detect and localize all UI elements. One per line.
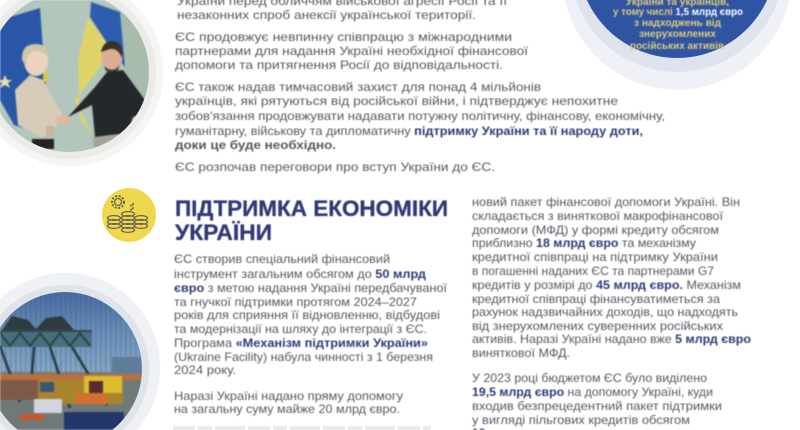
text block: left column on the Ukraine Facility: (Ukraine Facility) набула чинності з 1 березня	[174, 350, 433, 364]
text block: left column on the Ukraine Facility: євро з метою надання Україні передбачуваної	[174, 281, 448, 295]
text block: right column on macro-financial assistance: допомоги (МФД) у формі кредиту обсягом	[472, 223, 719, 237]
text block: EU support for Ukraine: гуманітарну, військову та дипломатичну підтримку України та її народу доти,	[175, 124, 643, 138]
text block: EU support for Ukraine: незаконних спроб анексії української території.	[177, 8, 476, 22]
text block: EU support for Ukraine: ЄС продовжує невпинну співпрацю з міжнародними	[175, 30, 512, 44]
text block: left column on the Ukraine Facility: Програма «Механізм підтримки України»	[174, 336, 428, 350]
circular callout: financial total	[565, 0, 789, 90]
text block: EU support for Ukraine	[175, 0, 665, 174]
text block: left column on the Ukraine Facility	[174, 252, 448, 416]
text block: EU support for Ukraine: українців, які рятуються від російської війни, і підтверджує непохитне	[175, 94, 618, 108]
text block: EU support for Ukraine: доки це буде необхідно.	[175, 138, 336, 152]
text block: right column on macro-financial assistance: у вигляді пільгових кредитів обсягом	[472, 413, 690, 427]
text block: left column on the Ukraine Facility: років для сприяння її відновленню, відбудові	[174, 308, 440, 322]
text block: EU support for Ukraine: ЄС розпочав переговори про вступ України до ЄС.	[175, 160, 495, 174]
text block: left column on the Ukraine Facility: та гнучкої підтримки протягом 2024–2027	[174, 295, 417, 309]
text block: EU support for Ukraine: зобов'язання продовжувати надавати потужну політичну, фінансову, економічну,	[175, 109, 665, 123]
text block: right column on macro-financial assistance: кредитної співпраці фінансуватиметься за	[472, 292, 720, 306]
heading: support for Ukraine's economy: ПІДТРИМКА ЕКОНОМІКИ	[175, 196, 448, 221]
photo: EU and Ukraine leaders shaking hands	[0, 0, 163, 166]
heading: support for Ukraine's economy	[175, 196, 448, 245]
text block: right column on macro-financial assistance: 19,5 млрд євро на допомогу Україні, куди	[472, 385, 713, 399]
text block: right column on macro-financial assistance	[472, 195, 751, 427]
circular callout: financial total: з надходжень від	[634, 18, 722, 29]
text block: right column on macro-financial assistance: У 2023 році бюджетом ЄС було виділено	[472, 371, 707, 385]
text block: right column on macro-financial assistance: складається з виняткової макрофінансової	[472, 209, 724, 223]
text block: EU support for Ukraine: ЄС також надав тимчасовий захист для понад 4 мільйонів	[175, 80, 541, 94]
text block: EU support for Ukraine: партнерами для надання Україні необхідної фінансової	[175, 44, 529, 58]
text block: right column on macro-financial assistance: в погашенні наданих ЄС та партнерами G7	[472, 264, 714, 278]
text block: right column on macro-financial assistance: входив безпрецедентний пакет підтримки	[472, 399, 722, 413]
text block: EU support for Ukraine: допомоги та притягнення Росії до відповідальності.	[175, 58, 503, 72]
circular callout: financial total: російських активів	[630, 41, 724, 52]
text block: left column on the Ukraine Facility: ЄС створив спеціальний фінансовий	[174, 252, 390, 266]
icon: coins and gear on yellow circle	[102, 188, 156, 242]
text block: right column on macro-financial assistance: активів. Наразі Україні надано вже 5 млрд євро	[472, 332, 751, 346]
text block: right column on macro-financial assistance: кредитної співпраці на підтримку України	[472, 250, 718, 264]
circular callout: financial total: знерухомлених	[639, 29, 716, 40]
text block: right column on macro-financial assistance: новий пакет фінансової допомоги Україні. Він	[472, 195, 740, 209]
text block: right column on macro-financial assistance: від знерухомлених суверенних російських	[472, 319, 723, 333]
text block: right column on macro-financial assistance: виняткової МФД.	[472, 346, 570, 360]
heading: support for Ukraine's economy: УКРАЇНИ	[175, 220, 272, 245]
text block: right column on macro-financial assistance: кредитів у розмірі до 45 млрд євро. Механізм	[472, 278, 741, 292]
photo: cargo port with cranes and containers	[0, 273, 160, 430]
text block: left column on the Ukraine Facility: 2024 року.	[174, 363, 236, 377]
circular callout: financial total: у тому числі 1,5 млрд євро	[613, 7, 743, 18]
text block: left column on the Ukraine Facility: Наразі Україні надано пряму допомогу	[174, 389, 403, 403]
text block: left column on the Ukraine Facility: інструмент загальним обсягом до 50 млрд	[174, 267, 426, 281]
text block: left column on the Ukraine Facility: на загальну суму майже 20 млрд євро.	[174, 402, 400, 416]
text block: left column on the Ukraine Facility: та модернізації на шляху до інтеграції з ЄС.	[174, 322, 427, 336]
text block: right column on macro-financial assistance: рахунок надзвичайних доходів, що надходять	[472, 305, 738, 319]
text block: right column on macro-financial assistance: приблизно 18 млрд євро та механізму	[472, 236, 696, 250]
